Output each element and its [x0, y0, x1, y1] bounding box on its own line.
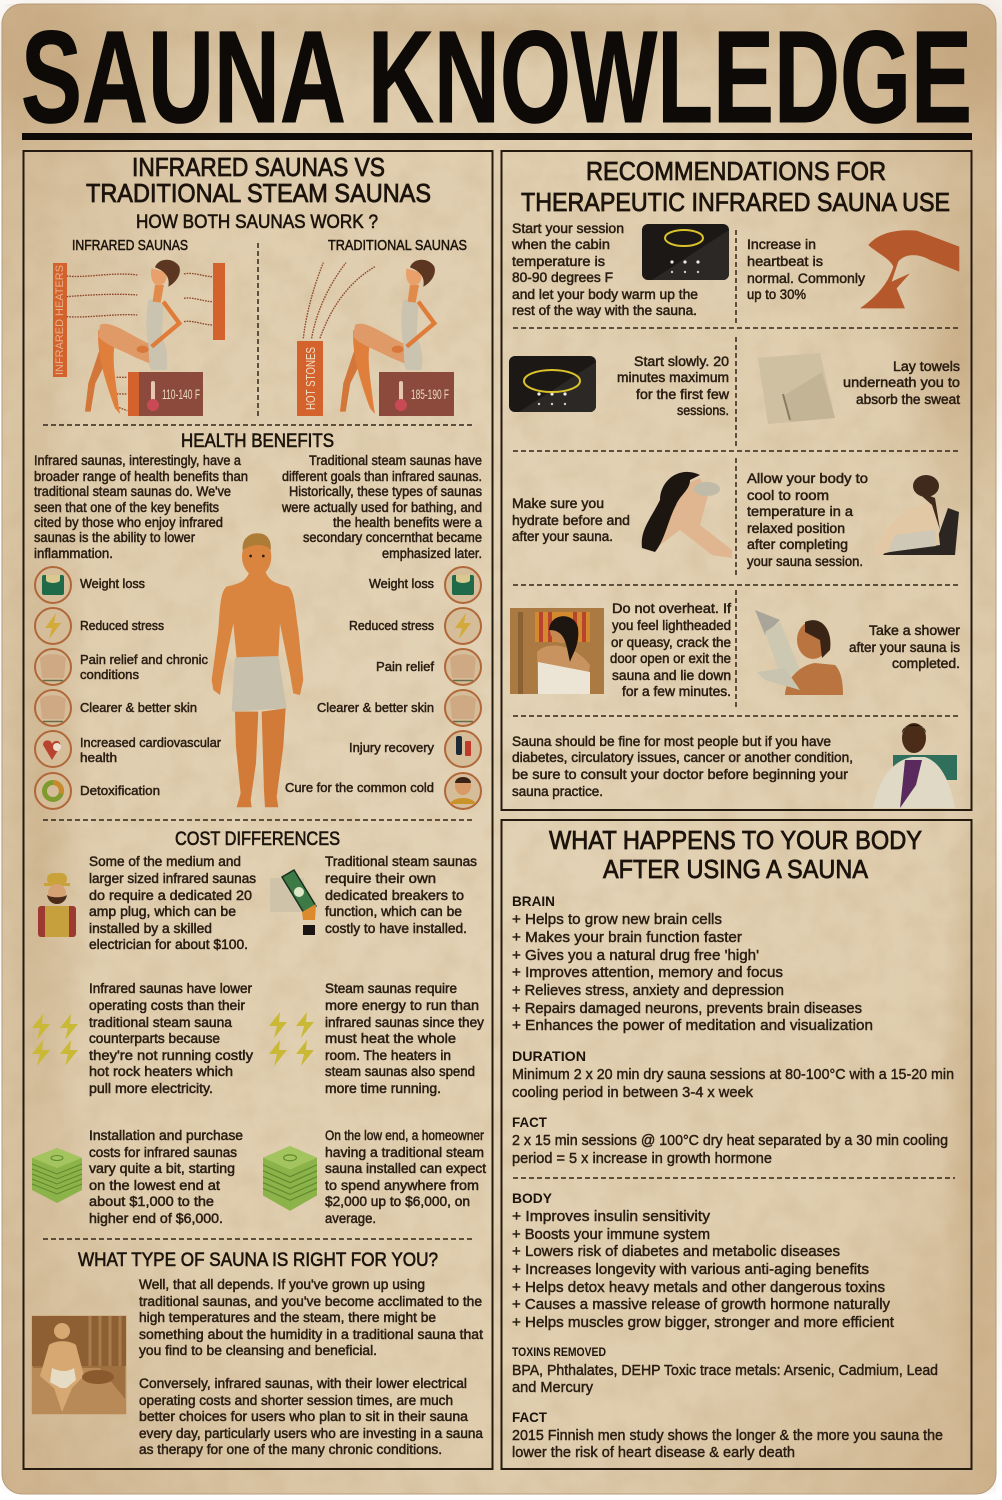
section: body: + Increases longevity with various anti-aging benefits	[512, 1262, 869, 1278]
text: what type of sauna answer: high temperatures and the steam, there might be	[139, 1310, 436, 1325]
text: traditional purchase cost: On the low end, a homeowner	[325, 1128, 484, 1143]
benefit: weight loss	[35, 567, 145, 603]
text: traditional benefits intro: Historically, these types of saunas	[289, 484, 482, 499]
tip: start session: and let your body warm up the	[512, 287, 698, 302]
text: infrared operating cost: traditional steam sauna	[89, 1015, 232, 1030]
section: brain: + Relieves stress, anxiety and depression	[512, 983, 784, 999]
text: steam operating cost: room. The heaters in	[325, 1048, 451, 1063]
benefit: common cold	[285, 773, 481, 809]
text: infrared purchase cost: higher end of $6,000.	[89, 1211, 223, 1226]
text: infrared plug cost: do require a dedicated 20	[89, 888, 252, 903]
picture: woman resting in chair	[873, 475, 959, 556]
icon: folded towel	[758, 353, 835, 424]
text: traditional breaker cost: require their own	[325, 871, 436, 886]
text: infrared plug cost: larger sized infrared saunas	[89, 871, 256, 886]
text: infrared purchase cost: vary quite a bit, starting	[89, 1161, 235, 1176]
tip: cool down: after completing	[747, 537, 848, 552]
heading: recommendations: RECOMMENDATIONS FOR	[586, 156, 886, 186]
picture: doctor	[873, 723, 957, 808]
text: steam operating cost: steam saunas also spend	[325, 1064, 475, 1079]
text: steam operating cost	[325, 981, 484, 1096]
section: toxins removed: and Mercury	[512, 1380, 594, 1396]
benefit: weight loss: Weight loss	[369, 576, 434, 591]
text: traditional purchase cost: having a traditional steam	[325, 1145, 484, 1160]
heading: infrared saunas vs traditional: INFRARED SAUNAS VS	[132, 152, 385, 182]
section: body: + Causes a massive release of growth hormone naturally	[512, 1297, 891, 1313]
section: body: + Helps muscles grow bigger, stronger and more efficient	[512, 1315, 894, 1331]
section: brain: + Makes your brain function faster	[512, 930, 742, 946]
text: infrared plug cost: installed by a skilled	[89, 921, 212, 936]
tip: start slowly: minutes maximum	[617, 370, 729, 385]
tip: hydrate: after your sauna.	[512, 529, 613, 544]
tip: start slowly: sessions.	[677, 403, 729, 418]
section: brain: + Improves attention, memory and focus	[512, 965, 783, 981]
icon: sauna timer panel	[509, 356, 596, 412]
picture: woman drinking water	[642, 472, 732, 558]
icon: traditional lightning bolts	[269, 1012, 314, 1066]
tip: cool down	[747, 471, 868, 569]
text: infrared purchase cost	[89, 1128, 243, 1226]
tip: cool down: temperature in a	[747, 504, 854, 519]
benefit: clearer skin	[35, 690, 197, 726]
heading: what type of sauna: WHAT TYPE OF SAUNA IS RIGHT FOR YOU?	[78, 1250, 438, 1271]
tip: consult doctor: Sauna should be fine for most people but if you have	[512, 734, 831, 749]
back heater panel	[213, 263, 225, 340]
panel: what happens to your body	[502, 820, 972, 1469]
text: infrared purchase cost: Installation and purchase	[89, 1128, 243, 1143]
benefit: pain relief: conditions	[80, 667, 139, 682]
tip: start slowly: for the first few	[636, 387, 729, 402]
benefit: pain relief: Pain relief	[376, 659, 434, 674]
section: fact: 2 x 15 min sessions @ 100°C dry heat separated by a 30 min cooling	[512, 1133, 948, 1149]
benefit: clearer skin: Clearer & better skin	[80, 700, 197, 715]
picture: woman overheated in sauna	[510, 608, 604, 694]
label: traditional saunas: TRADITIONAL SAUNAS	[328, 238, 467, 254]
tip: consult doctor	[512, 734, 853, 799]
text: infrared plug cost: amp plug, which can be	[89, 904, 236, 919]
text: what type of sauna answer: operating costs and shorter session times, are much	[139, 1393, 453, 1408]
tip: lay towels: Lay towels	[893, 359, 960, 374]
heading: health benefits: HEALTH BENEFITS	[181, 431, 334, 452]
section: fact: FACT	[512, 1114, 547, 1130]
text: traditional benefits intro: were actually used for bathing, and	[281, 500, 482, 515]
tip: heartbeat: up to 30%	[747, 287, 806, 302]
text: traditional benefits intro	[281, 453, 482, 561]
text: infrared plug cost	[89, 854, 256, 952]
section: body: + Lowers risk of diabetes and metabolic diseases	[512, 1244, 840, 1260]
text: what type of sauna answer: Well, that all depends. If you've grown up using	[139, 1277, 425, 1292]
figure: man in towel	[212, 533, 303, 807]
section: duration	[512, 1048, 954, 1101]
tip: cool down: Allow your body to	[747, 471, 868, 486]
section: toxins removed: TOXINS REMOVED	[512, 1345, 606, 1359]
tip: start session: rest of the way with the sauna.	[512, 303, 697, 318]
text: steam operating cost: more time running.	[325, 1081, 441, 1096]
steam lines	[303, 263, 375, 338]
heat waves	[67, 273, 213, 411]
text: infrared benefits intro: seen that one of the key benefits	[34, 500, 219, 515]
icon: cash stack	[32, 1148, 82, 1203]
tip: lay towels: absorb the sweat	[856, 392, 960, 407]
panel: infrared vs traditional saunas	[24, 151, 492, 1469]
tip: take a shower: completed.	[892, 656, 960, 671]
bench with temperature: 110-140 F	[162, 386, 200, 402]
section: toxins removed	[512, 1345, 938, 1396]
text: traditional purchase cost: average.	[325, 1211, 376, 1226]
text: steam operating cost: more energy to run than	[325, 998, 479, 1013]
tip: hydrate	[512, 496, 630, 544]
icon: infrared lightning bolts	[32, 1014, 78, 1066]
section: brain: BRAIN	[512, 893, 555, 909]
seated woman	[85, 260, 180, 414]
benefit: cardiovascular health	[35, 731, 222, 767]
section: fact	[512, 1114, 948, 1167]
text: steam operating cost: Steam saunas require	[325, 981, 457, 996]
tip: heartbeat: heartbeat is	[747, 254, 823, 269]
text: traditional benefits intro: secondary concernthat became	[303, 530, 482, 545]
text: infrared benefits intro: Infrared saunas, interestingly, have a	[34, 453, 241, 468]
tip: heartbeat: normal. Commonly	[747, 271, 865, 286]
text: infrared benefits intro: traditional steam saunas do. We've	[34, 484, 231, 499]
text: steam operating cost: must heat the whole	[325, 1031, 456, 1046]
text: steam operating cost: infrared saunas since they	[325, 1015, 484, 1030]
benefit: pain relief	[35, 649, 208, 685]
benefit: injury recovery	[349, 731, 481, 767]
bench with temperature	[128, 372, 203, 416]
tip: lay towels: underneath you to	[843, 375, 960, 390]
text: infrared operating cost: they're not running costly	[89, 1048, 253, 1063]
text: what type of sauna answer: you find to be cleansing and beneficial.	[139, 1343, 377, 1358]
section: duration: DURATION	[512, 1048, 586, 1064]
text: infrared operating cost: counterparts because	[89, 1031, 220, 1046]
benefit: injury recovery: Injury recovery	[349, 740, 434, 755]
text: what type of sauna answer: as therapy for one of the many chronic conditions.	[139, 1442, 442, 1457]
text: infrared plug cost: electrician for about $100.	[89, 937, 248, 952]
tip: take a shower: Take a shower	[869, 623, 961, 638]
benefit: cardiovascular health: health	[80, 750, 117, 765]
benefit: reduced stress: Reduced stress	[80, 618, 164, 633]
hot stones block	[297, 341, 323, 416]
label: infrared saunas: INFRARED SAUNAS	[72, 238, 188, 254]
benefit: weight loss	[369, 567, 481, 603]
benefit: clearer skin: Clearer & better skin	[317, 700, 434, 715]
tip: do not overheat	[610, 601, 731, 699]
text: traditional benefits intro: different goals than infrared saunas.	[282, 469, 482, 484]
tip: do not overheat: door open or exit the	[610, 651, 731, 666]
text: traditional benefits intro: emphasized later.	[382, 546, 482, 561]
text: infrared purchase cost: on the lowest end at	[89, 1178, 220, 1193]
section: brain: + Helps to grow new brain cells	[512, 912, 722, 928]
section: brain: + Repairs damaged neurons, prevents brain diseases	[512, 1001, 862, 1017]
section: body: + Boosts your immune system	[512, 1227, 710, 1243]
heading: infrared saunas vs traditional: TRADITIONAL STEAM SAUNAS	[86, 178, 431, 208]
tip: do not overheat: sauna and lie down	[612, 668, 731, 683]
section: body: + Improves insulin sensitivity	[512, 1209, 711, 1225]
text: infrared purchase cost: about $1,000 to the	[89, 1194, 214, 1209]
text: traditional purchase cost	[325, 1128, 486, 1226]
text: traditional purchase cost: sauna installed can expect	[325, 1161, 486, 1176]
tip: do not overheat: for a few minutes.	[622, 684, 731, 699]
icon: sauna control panel	[642, 224, 729, 280]
text: infrared benefits intro	[34, 453, 248, 561]
benefit: weight loss: Weight loss	[80, 576, 145, 591]
tip: start session: when the cabin	[511, 237, 610, 252]
benefit: pain relief	[376, 649, 481, 685]
icon: hand on wrist	[860, 230, 959, 308]
heading: recommendations	[521, 156, 950, 217]
title rule	[22, 133, 972, 140]
section: brain	[512, 893, 873, 1034]
tip: do not overheat: Do not overheat. If	[612, 601, 731, 616]
tip: lay towels	[843, 359, 960, 407]
section: body: BODY	[512, 1190, 553, 1206]
text: traditional benefits intro: the health benefits were a	[333, 515, 482, 530]
text: what type of sauna answer: Conversely, infrared saunas, with their lower electrical	[139, 1376, 467, 1391]
text: infrared benefits intro: saunas is the ability to lower	[34, 530, 195, 545]
benefit: reduced stress	[35, 608, 164, 644]
benefit: common cold: Cure for the common cold	[285, 780, 434, 795]
tip: start slowly: Start slowly. 20	[634, 354, 729, 369]
text: infrared plug cost: Some of the medium and	[89, 854, 241, 869]
benefit: cardiovascular health: Increased cardiovascular	[80, 735, 222, 750]
text: traditional breaker cost	[325, 854, 477, 936]
section: finnish study fact: 2015 Finnish men study shows the longer & the more you sauna the	[512, 1428, 943, 1444]
tip: start session	[511, 221, 698, 318]
heading: what happens: WHAT HAPPENS TO YOUR BODY	[549, 825, 922, 855]
text: traditional purchase cost: to spend anywhere from	[325, 1178, 479, 1193]
heading: what happens	[549, 825, 922, 884]
section: fact: period = 5 x increase in growth hormone	[512, 1151, 772, 1167]
tip: do not overheat: or queasy, crack the	[611, 635, 731, 650]
text: traditional breaker cost: dedicated breakers to	[325, 888, 464, 903]
icon: hand paying money	[270, 870, 316, 935]
tip: cool down: cool to room	[747, 488, 829, 503]
text: infrared benefits intro: inflammation.	[34, 546, 113, 561]
tip: heartbeat: Increase in	[747, 237, 816, 252]
tip: start session: 80-90 degrees F	[512, 270, 613, 285]
tip: consult doctor: sauna practice.	[512, 784, 603, 799]
tip: hydrate: hydrate before and	[512, 513, 630, 528]
text: infrared operating cost: operating costs than their	[89, 998, 246, 1013]
subheading: how both saunas work: HOW BOTH SAUNAS WORK ?	[136, 212, 378, 233]
tip: start slowly	[617, 354, 729, 418]
section: body: + Helps detox heavy metals and other dangerous toxins	[512, 1280, 885, 1296]
tip: consult doctor: be sure to consult your doctor before beginning your	[512, 767, 849, 782]
diagram: infrared sauna	[53, 260, 225, 416]
section: finnish study fact: lower the risk of heart disease & early death	[512, 1445, 795, 1461]
picture: man in shower	[755, 610, 843, 695]
benefits list: infrared	[35, 567, 222, 809]
text: what type of sauna answer: something about the humidity in a traditional sauna that	[139, 1327, 483, 1342]
section: duration: Minimum 2 x 20 min dry sauna sessions at 80-100°C with a 15-20 min	[512, 1067, 954, 1083]
infrared heater panel: INFRARED HEATERS	[54, 265, 66, 375]
text: traditional breaker cost: costly to have installed.	[325, 921, 467, 936]
text: traditional breaker cost: Traditional steam saunas	[325, 854, 477, 869]
text: traditional benefits intro: Traditional steam saunas have	[309, 453, 482, 468]
tip: heartbeat	[747, 237, 865, 302]
text: infrared operating cost: Infrared saunas have lower	[89, 981, 253, 996]
benefit: detoxification	[35, 773, 160, 809]
benefits list: traditional	[285, 567, 481, 809]
section: duration: cooling period in between 3-4 x week	[512, 1085, 754, 1101]
text: infrared benefits intro: cited by those who enjoy infrared	[34, 515, 223, 530]
heading: recommendations: THERAPEUTIC INFRARED SAUNA USE	[521, 187, 950, 217]
icon: electrician	[38, 873, 76, 937]
heading: infrared saunas vs traditional	[86, 152, 431, 208]
tip: take a shower	[849, 623, 961, 671]
tip: consult doctor: diabetes, circulatory issues, cancer or another condition,	[512, 750, 853, 765]
text: infrared benefits intro: broader range of health benefits than	[34, 469, 248, 484]
heading: cost differences: COST DIFFERENCES	[175, 829, 340, 850]
benefit: clearer skin	[317, 690, 481, 726]
icon: cash stack	[263, 1146, 317, 1211]
text: what type of sauna answer: every day, particularly users who are investing in a sauna	[139, 1426, 483, 1441]
tip: cool down: relaxed position	[747, 521, 845, 536]
section: body	[512, 1190, 894, 1331]
section: finnish study fact: FACT	[512, 1409, 547, 1425]
text: what type of sauna answer	[139, 1277, 483, 1457]
text: what type of sauna answer: traditional saunas, and you've become acclimated to the	[139, 1294, 482, 1309]
benefit: reduced stress: Reduced stress	[349, 618, 434, 633]
text: traditional breaker cost: function, which can be	[325, 904, 462, 919]
text: infrared purchase cost: costs for infrared saunas	[89, 1145, 237, 1160]
section: brain: + Gives you a natural drug free 'high'	[512, 948, 759, 964]
section: toxins removed: BPA, Phthalates, DEHP Toxic trace metals: Arsenic, Cadmium, Lead	[512, 1363, 938, 1379]
text: infrared operating cost: hot rock heaters which	[89, 1064, 233, 1079]
tip: hydrate: Make sure you	[512, 496, 604, 511]
text: infrared operating cost: pull more electricity.	[89, 1081, 213, 1096]
tip: cool down: your sauna session.	[747, 554, 863, 569]
benefit: detoxification: Detoxification	[80, 783, 160, 798]
diagram: traditional sauna	[297, 260, 454, 416]
tip: start session: temperature is	[512, 254, 605, 269]
benefit: reduced stress	[349, 608, 481, 644]
section: finnish study fact	[512, 1409, 943, 1461]
panel: recommendations	[502, 151, 972, 810]
picture: man in sauna	[32, 1316, 126, 1414]
bench with temperature	[379, 372, 454, 416]
heading: what happens: AFTER USING A SAUNA	[603, 854, 869, 884]
seated woman	[340, 260, 435, 414]
text: traditional purchase cost: $2,000 up to $6,000, on	[325, 1194, 470, 1209]
tip: start session: Start your session	[512, 221, 624, 236]
text: what type of sauna answer: better choices for users who plan to sit in their sauna	[139, 1409, 469, 1424]
benefit: pain relief: Pain relief and chronic	[80, 652, 208, 667]
hot stones block: HOT STONES	[303, 347, 318, 410]
section: brain: + Enhances the power of meditation and visualization	[512, 1018, 873, 1034]
text: infrared operating cost	[89, 981, 253, 1096]
bench with temperature: 185-190 F	[411, 386, 449, 402]
tip: do not overheat: you feel lightheaded	[612, 618, 731, 633]
tip: take a shower: after your sauna is	[849, 640, 960, 655]
